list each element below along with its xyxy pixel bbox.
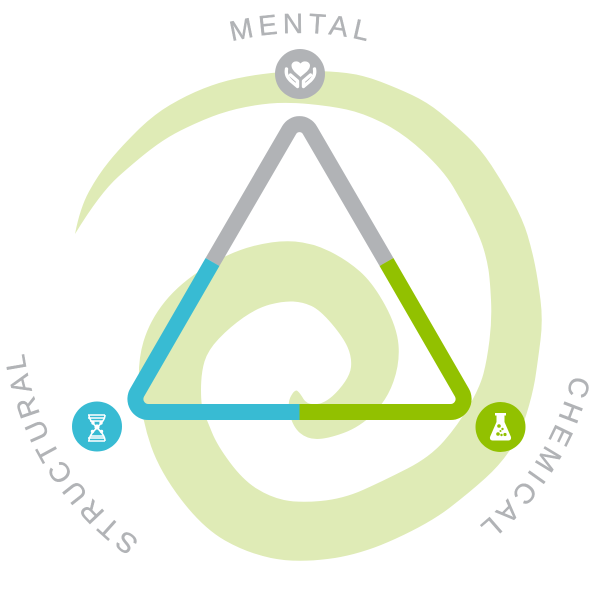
triangle side: mental (gray)	[212, 124, 386, 262]
triangle side: structural (blue)	[135, 262, 300, 412]
triangle	[135, 124, 464, 412]
icon: flask	[476, 402, 526, 452]
label: STRUCTURAL: STRUCTURAL	[6, 354, 137, 553]
label: MENTAL: MENTAL	[230, 14, 367, 42]
label: CHEMICAL: CHEMICAL	[480, 378, 589, 534]
icon: DNA helix	[72, 402, 122, 452]
icon: heart in hands	[275, 49, 325, 99]
green spiral background	[75, 71, 542, 561]
triangle side: chemical (green)	[300, 262, 464, 412]
